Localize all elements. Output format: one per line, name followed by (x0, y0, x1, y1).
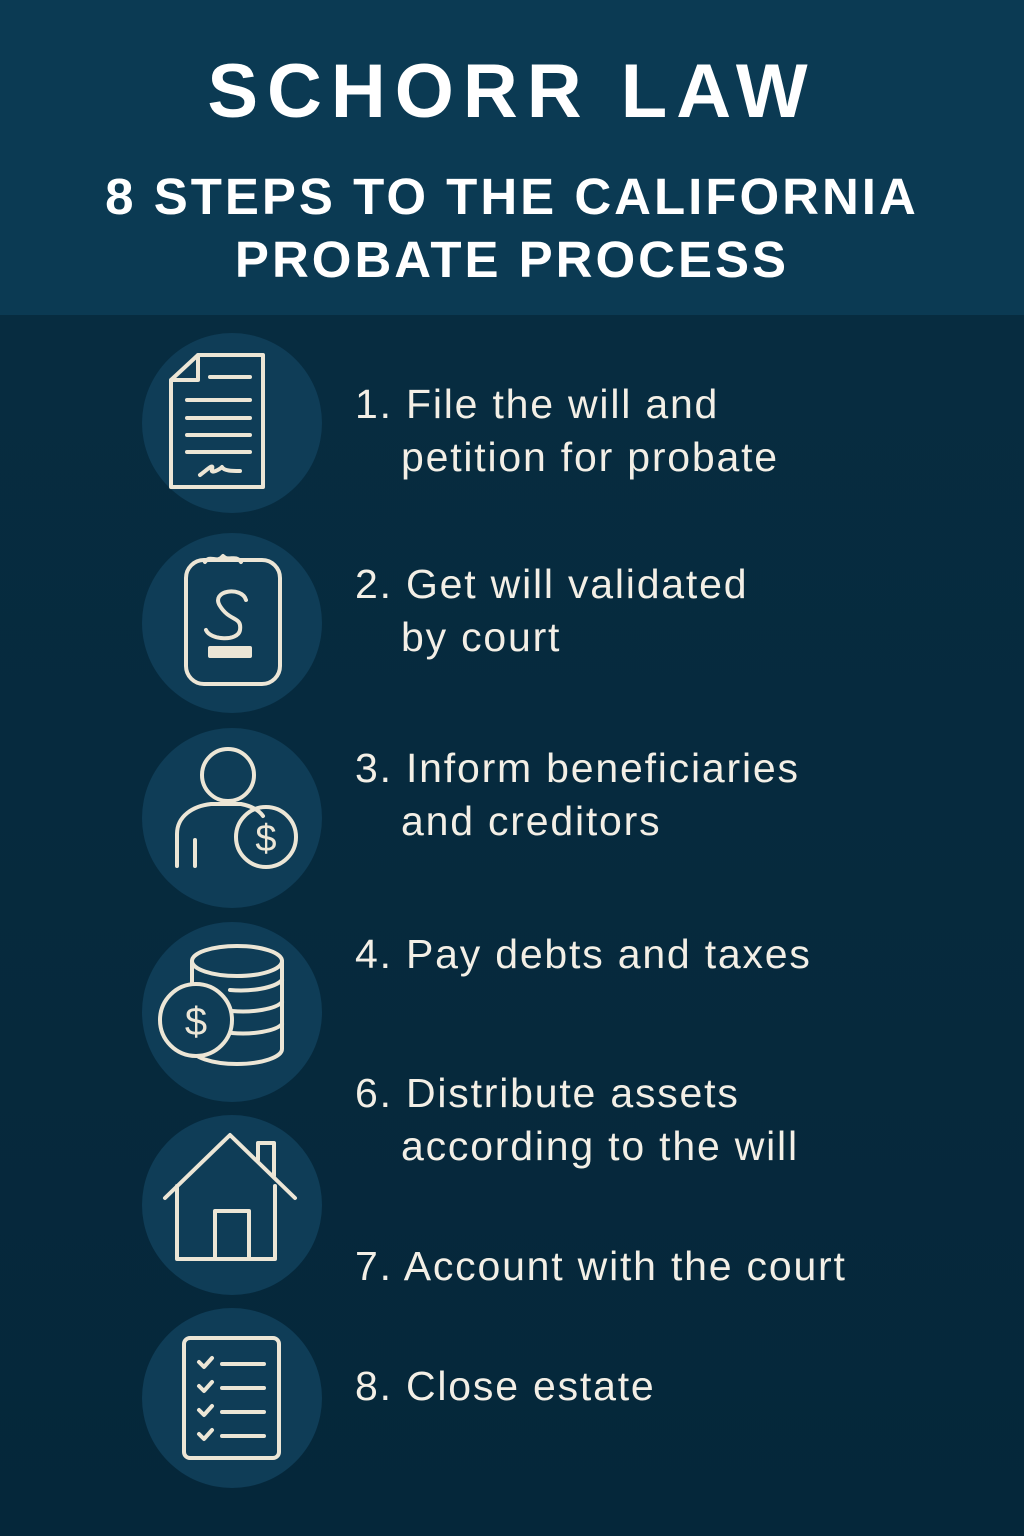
step 3 (355, 745, 800, 844)
step 4: 4. Pay debts and taxes (355, 931, 812, 977)
step 1: petition for probate (401, 434, 779, 480)
step 1 (355, 381, 779, 480)
step 6: according to the will (401, 1123, 799, 1169)
step 7: 7. Account with the court (355, 1243, 847, 1289)
step 2: 2. Get will validated (355, 561, 748, 607)
icon: document (142, 333, 322, 513)
icon: checklist (142, 1308, 322, 1488)
icon: coins (142, 922, 322, 1102)
title: SCHORR LAW (207, 49, 817, 134)
subtitle: 8 STEPS TO THE CALIFORNIA (105, 168, 919, 225)
step 8: 8. Close estate (355, 1363, 656, 1409)
subtitle (105, 168, 919, 288)
step 3: 3. Inform beneficiaries (355, 745, 800, 791)
step 6: 6. Distribute assets (355, 1070, 740, 1116)
step 2: by court (401, 614, 561, 660)
icon: house (142, 1115, 322, 1295)
header (0, 0, 1024, 315)
step 3: and creditors (401, 798, 661, 844)
icon: person with dollar: $ (255, 818, 277, 860)
step 1: 1. File the will and (355, 381, 719, 427)
icon: person with dollar (142, 728, 322, 908)
step 2 (355, 561, 748, 660)
icon: coins: $ (185, 1000, 207, 1044)
subtitle: PROBATE PROCESS (235, 231, 789, 288)
step 6 (355, 1070, 799, 1169)
icon: validated clipboard (142, 533, 322, 713)
steps panel (0, 315, 1024, 1536)
